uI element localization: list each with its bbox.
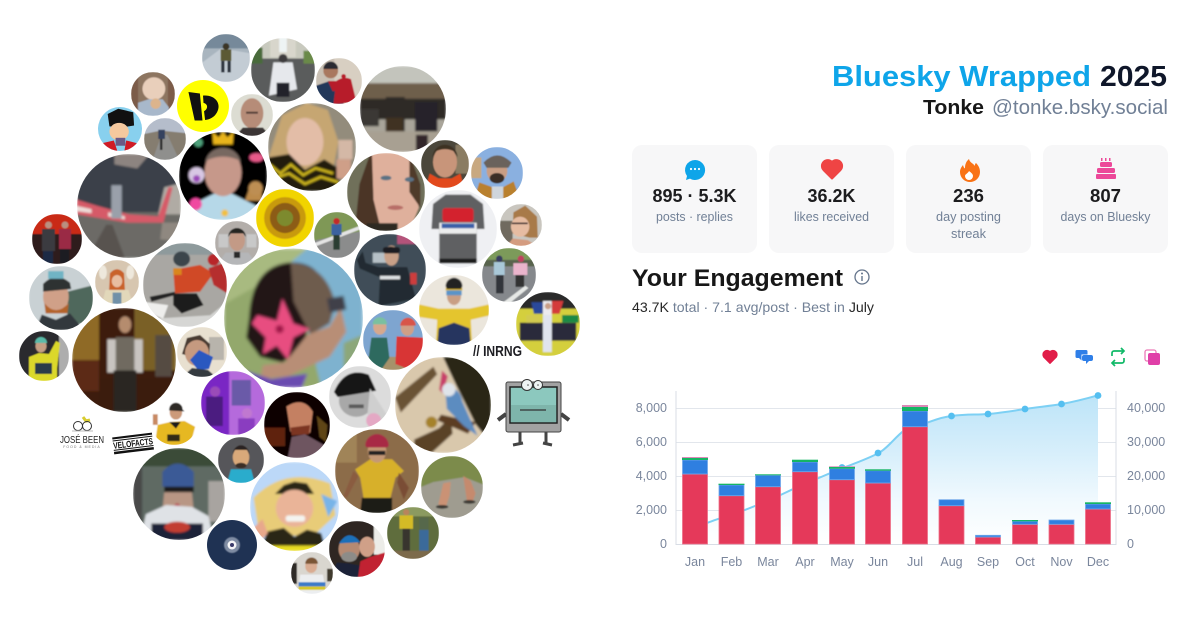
- stat card: likes received: [769, 145, 894, 253]
- avatar: muddy crowd: [360, 66, 446, 154]
- chart: monthly engagement bars and cumulative line: 30,000: [1127, 435, 1165, 449]
- avatar: brunette woman: [347, 153, 425, 231]
- icon: info: [855, 270, 869, 284]
- avatar: rider in yellow jersey with arms out: [419, 275, 489, 345]
- avatar: woman with Miffy art: [95, 260, 139, 304]
- chart: monthly engagement bars and cumulative line: 6,000: [636, 435, 667, 449]
- logo: Jose Been: JOSÉ BEEN: [60, 433, 104, 446]
- avatar: baby: [131, 72, 175, 116]
- avatar: man with flat cap and beard: [471, 147, 523, 199]
- avatar: solar eclipse: [207, 520, 257, 570]
- icon: heart: [822, 160, 842, 178]
- icon: legend quotes: [1145, 350, 1160, 365]
- chart: monthly engagement bars and cumulative line: 2,000: [636, 503, 667, 517]
- icon: legend replies: [1076, 350, 1093, 364]
- avatar: budgie on branches: [395, 357, 491, 453]
- avatar: climber: [202, 34, 250, 82]
- avatar: cartoon boy: [98, 107, 142, 151]
- avatar: bald man: [231, 94, 273, 136]
- logo: Velofacts: VELOFACTS: [113, 436, 154, 451]
- avatar: blonde woman in yellow pattern: [268, 103, 356, 191]
- chart: monthly engagement bars and cumulative line: 4,000: [636, 469, 667, 483]
- engagement summary: 43.7K total · 7.1 avg/post · Best in July: [632, 299, 874, 315]
- stat card: days on Bluesky: 807: [1090, 186, 1121, 206]
- avatar: two riders holding hands: [482, 248, 536, 302]
- chart: monthly engagement bars and cumulative line: 10,000: [1127, 503, 1165, 517]
- icon: birthday cake: [1096, 158, 1116, 179]
- chart: monthly engagement bars and cumulative line: 8,000: [636, 401, 667, 415]
- stat card: day posting streak: day posting: [936, 210, 1001, 224]
- icon: chat bubble: [685, 160, 705, 180]
- chart: monthly engagement bars and cumulative line: Sep: [977, 555, 999, 569]
- chart: monthly engagement bars and cumulative line: 0: [660, 537, 667, 551]
- avatar cluster: [19, 34, 580, 594]
- stat card: days on Bluesky: [1043, 145, 1168, 253]
- stat card: likes received: 36.2K: [808, 186, 856, 206]
- icon: flame: [960, 159, 980, 182]
- avatar: two riders talking: [363, 310, 423, 370]
- heading: Your Engagement: Your Engagement: [632, 265, 843, 292]
- stat card: posts and replies: posts · replies: [656, 210, 733, 224]
- avatar: man with red kettle: [316, 58, 362, 104]
- avatar: woman in star frame: [250, 462, 339, 551]
- avatar: emoji style man: [218, 437, 264, 483]
- stat card: day posting streak: [906, 145, 1031, 253]
- avatar: cyclocross crowd: [77, 154, 181, 258]
- avatar: man in orange hood: [421, 140, 469, 188]
- avatar: riders in field: [387, 507, 439, 559]
- avatar: rider at arch: [251, 38, 315, 102]
- avatar: purple performance photo: [201, 371, 265, 435]
- chart: monthly engagement bars and cumulative line: Aug: [940, 555, 963, 569]
- avatar: man with blue mask: [177, 327, 227, 377]
- logo: Velofacts: [112, 433, 154, 454]
- icon: legend heart: [1043, 350, 1057, 364]
- avatar: black and white portrait: [329, 366, 391, 428]
- chart legend: [1043, 348, 1160, 366]
- cumulative line: [695, 395, 1098, 527]
- chart: monthly engagement bars and cumulative line: 20,000: [1127, 469, 1165, 483]
- title: 2025: [1100, 61, 1167, 93]
- avatar: road and mountains: [144, 118, 186, 160]
- avatar: cyclists in orange: [143, 243, 227, 327]
- avatar: thumbs up in water: [421, 456, 483, 518]
- chart: monthly engagement bars and cumulative line: [636, 391, 1165, 569]
- avatar: woman with pink flower in hair: [224, 248, 363, 388]
- stat card: day posting streak: 236: [953, 186, 984, 206]
- chart: monthly engagement bars and cumulative line: Oct: [1015, 555, 1035, 569]
- user name and handle: Tonke: [923, 97, 984, 119]
- avatar: rider in yellow with fist: [152, 402, 196, 445]
- avatar: man in waistcoat on stairs: [72, 308, 176, 412]
- avatar: woman in rainbow jersey: [291, 552, 333, 594]
- avatar: rider in yellow against wall: [335, 429, 419, 513]
- avatar: yellow D logo: [177, 80, 229, 132]
- icon: legend reposts: [1112, 348, 1124, 366]
- stat card: likes received: likes received: [794, 210, 869, 224]
- avatar: team jersey: [419, 190, 497, 268]
- chart: monthly engagement bars and cumulative line: Apr: [795, 555, 815, 569]
- avatar: FDJ rider saluting: [354, 234, 426, 306]
- avatar: woman with glasses: [500, 204, 542, 246]
- stacked bars: [682, 405, 1111, 544]
- logo: INRNG: // INRNG: [473, 344, 522, 360]
- chart: monthly engagement bars and cumulative line: Feb: [721, 555, 742, 569]
- chart: monthly engagement bars and cumulative line: Jan: [685, 555, 705, 569]
- avatar: rider with tongue out: [133, 448, 225, 540]
- avatar: man in grey hoodie: [215, 221, 259, 265]
- stat card: day posting streak: streak: [951, 227, 987, 241]
- avatar: couple with blue beanie: [329, 521, 385, 577]
- logo: Jose Been: [60, 417, 104, 449]
- avatar: couple on red: [32, 214, 82, 264]
- icon: monitor mascot: [498, 380, 569, 445]
- chart: monthly engagement bars and cumulative line: Jul: [907, 555, 923, 569]
- avatar: rider in yellow, raised arm: [19, 331, 69, 381]
- chart: monthly engagement bars and cumulative line: 40,000: [1127, 401, 1165, 415]
- chart: monthly engagement bars and cumulative line: Jun: [868, 555, 888, 569]
- chart: monthly engagement bars and cumulative line: May: [830, 555, 855, 569]
- chart: monthly engagement bars and cumulative line: Dec: [1087, 555, 1109, 569]
- avatar: man with crown and emojis: [179, 132, 267, 220]
- avatar: man with cycling cap and beard: [29, 266, 93, 330]
- chart: monthly engagement bars and cumulative line: Mar: [757, 555, 779, 569]
- chart: monthly engagement bars and cumulative line: 0: [1127, 537, 1134, 551]
- chart: monthly engagement bars and cumulative line: Nov: [1050, 555, 1073, 569]
- cumulative area: [695, 395, 1098, 544]
- stat card: days on Bluesky: days on Bluesky: [1060, 210, 1151, 224]
- stat card: posts and replies: 895 · 5.3K: [652, 186, 736, 206]
- stat card: posts and replies: [632, 145, 757, 253]
- title: Bluesky Wrapped: [832, 61, 1091, 93]
- avatar: red-bearded man on stage: [264, 392, 330, 458]
- avatar: rider on podium with French flag: [516, 292, 580, 356]
- avatar: rider on road: [314, 212, 360, 258]
- user name and handle: [923, 97, 1168, 119]
- logo: Jose Been: FOOD & MEDIA: [63, 445, 101, 449]
- user name and handle: @tonke.bsky.social: [992, 97, 1168, 119]
- avatar: sunflower: [256, 189, 314, 247]
